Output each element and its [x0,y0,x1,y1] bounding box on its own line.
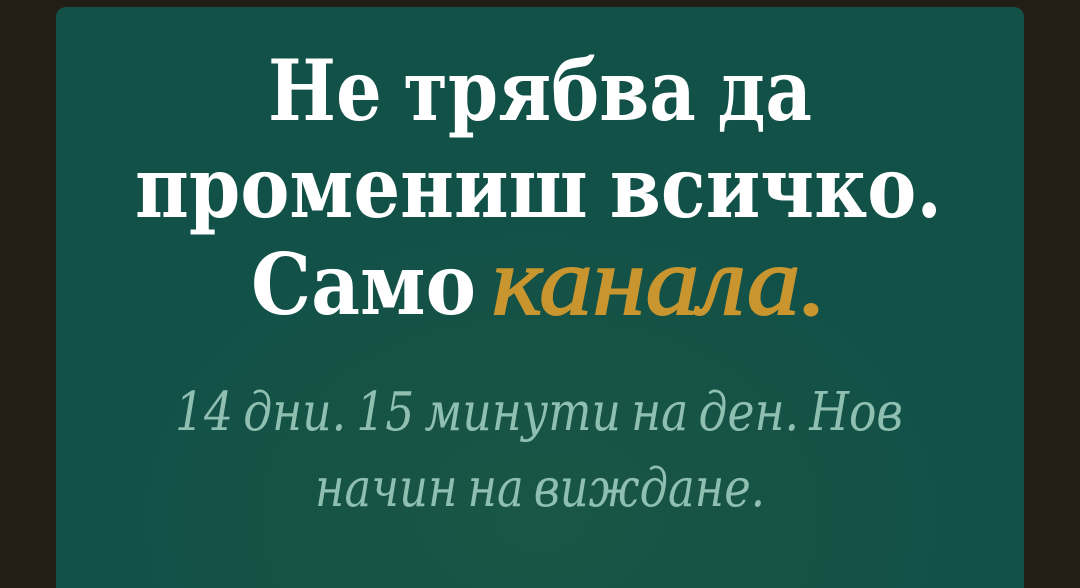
subtitle line 1: 14 дни. 15 минути на ден. Нов [175,382,903,443]
title line 1: Не трябва да [268,41,812,140]
title line 3: Само [251,235,476,334]
gold highlight word: канала. [492,228,827,335]
subtitle line 2: начин на виждане. [315,458,765,519]
title [135,41,942,335]
subtitle [175,382,903,519]
title line 2: промениш всичко. [135,138,942,237]
